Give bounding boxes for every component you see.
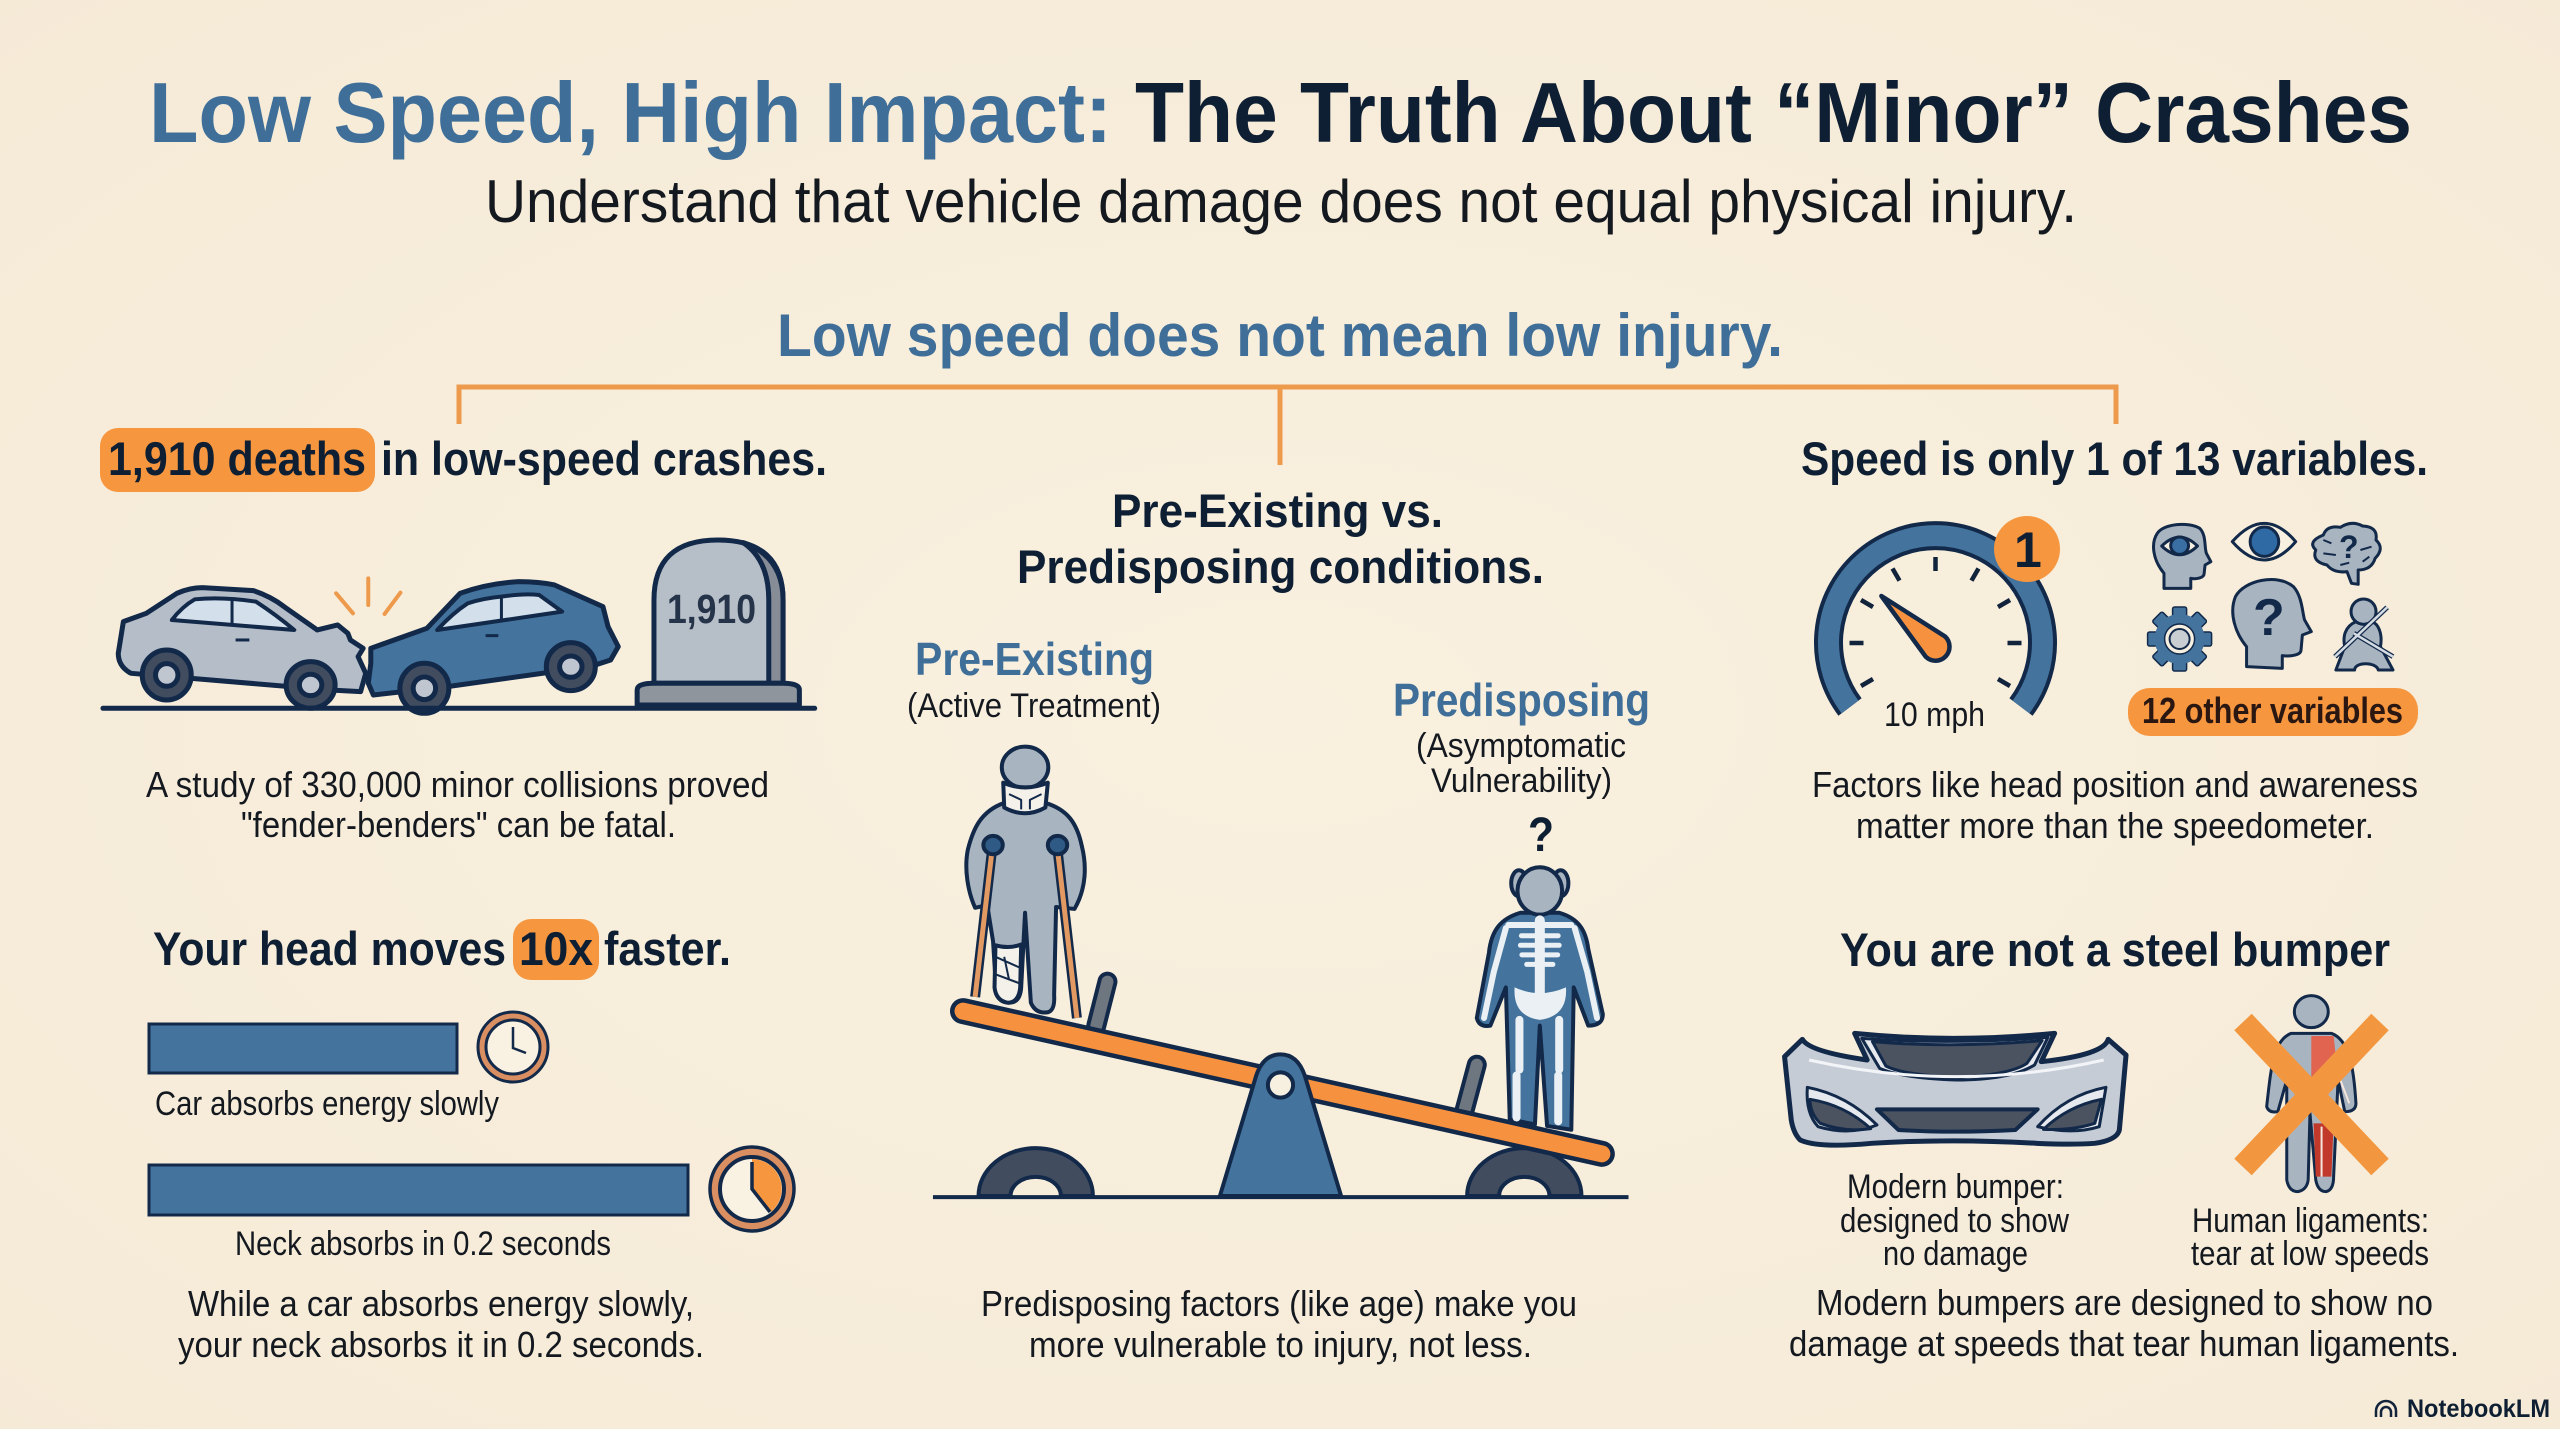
label: pre-existing: Pre-Existing bbox=[915, 633, 1154, 685]
label: predisposing: Predisposing bbox=[1393, 674, 1650, 726]
title: Low Speed, High Impact: bbox=[149, 66, 1112, 161]
heading with highlight: faster. bbox=[604, 922, 731, 975]
panel: head moves faster bbox=[149, 919, 794, 1365]
icon: clock fast bbox=[710, 1147, 794, 1231]
icon: speedometer: 10 mph bbox=[1884, 696, 1985, 734]
caption: A study of 330,000 minor collisions proved bbox=[146, 764, 769, 805]
question marks on icons: ? bbox=[2339, 529, 2359, 565]
label: human ligaments: Human ligaments: bbox=[2192, 1202, 2429, 1240]
panel: not a steel bumper bbox=[1785, 923, 2459, 1364]
caption: Factors like head position and awareness bbox=[1812, 764, 2418, 805]
figure: person with visible skeleton bbox=[1477, 867, 1603, 1130]
icon: speedometer: 1 bbox=[2014, 522, 2042, 578]
bar: car bbox=[149, 1024, 457, 1073]
seesaw stoppers bbox=[1096, 982, 1477, 1110]
bracket connector bbox=[459, 387, 2116, 465]
icon: speedometer bbox=[1828, 516, 2060, 734]
label: predisposing: Vulnerability) bbox=[1431, 762, 1612, 800]
label: car: Car absorbs energy slowly bbox=[155, 1085, 499, 1123]
icon: gear bbox=[2148, 607, 2212, 671]
watermark: NotebookLM: NotebookLM bbox=[2407, 1395, 2550, 1423]
heading bbox=[1017, 484, 1544, 593]
caption bbox=[981, 1283, 1577, 1365]
label: pre-existing bbox=[907, 633, 1161, 725]
caption: matter more than the speedometer. bbox=[1856, 805, 2374, 846]
wheels bbox=[979, 1148, 1581, 1196]
heading with highlight: in low-speed crashes. bbox=[381, 432, 827, 485]
illustration: human with ligaments crossed out bbox=[2267, 996, 2356, 1192]
panel: speed is one of 13 variables bbox=[1801, 432, 2428, 846]
label: human ligaments: tear at low speeds bbox=[2191, 1235, 2429, 1273]
caption: your neck absorbs it in 0.2 seconds. bbox=[178, 1324, 704, 1365]
caption bbox=[1812, 764, 2418, 846]
question marks on icons: ? bbox=[2253, 589, 2285, 647]
caption: "fender-benders" can be fatal. bbox=[241, 804, 676, 845]
title: The Truth About “Minor” Crashes bbox=[1135, 66, 2412, 161]
figure: injured person on crutches bbox=[966, 747, 1085, 1018]
label: modern bumper: Modern bumper: bbox=[1847, 1168, 2064, 1206]
panel: deaths in low-speed crashes bbox=[100, 428, 827, 845]
heading: Predisposing conditions. bbox=[1017, 540, 1544, 593]
caption: While a car absorbs energy slowly, bbox=[188, 1283, 694, 1324]
question marks on icons bbox=[2253, 529, 2359, 647]
illustration: seesaw with two figures bbox=[933, 747, 1629, 1197]
heading: Speed is only 1 of 13 variables. bbox=[1801, 432, 2428, 485]
heading with highlight: 10x bbox=[519, 922, 593, 975]
heading: Pre-Existing vs. bbox=[1112, 484, 1443, 537]
label: modern bumper: no damage bbox=[1883, 1235, 2028, 1273]
label: human ligaments bbox=[2191, 1202, 2429, 1273]
illustration: bumper bbox=[1785, 1033, 2126, 1145]
label: pre-existing: (Active Treatment) bbox=[907, 687, 1161, 725]
caption: damage at speeds that tear human ligaments. bbox=[1789, 1323, 2459, 1364]
caption bbox=[146, 764, 769, 845]
icons: other variables bbox=[2154, 523, 2393, 670]
title bbox=[149, 66, 2412, 161]
main message heading: Low speed does not mean low injury. bbox=[777, 302, 1783, 369]
caption: more vulnerable to injury, not less. bbox=[1029, 1324, 1532, 1365]
caption bbox=[178, 1283, 704, 1365]
label: predisposing: (Asymptomatic bbox=[1416, 727, 1626, 765]
plank bbox=[963, 1011, 1602, 1154]
caption: Predisposing factors (like age) make you bbox=[981, 1283, 1577, 1324]
heading with highlight bbox=[100, 428, 827, 492]
icon: clock slow bbox=[478, 1012, 548, 1082]
pill: 12 other variables: 12 other variables bbox=[2142, 690, 2403, 731]
question mark: ? bbox=[1528, 809, 1554, 862]
heading with highlight: Your head moves bbox=[153, 922, 506, 975]
fulcrum bbox=[1220, 1054, 1341, 1196]
label: modern bumper bbox=[1840, 1168, 2069, 1273]
subtitle: Understand that vehicle damage does not equal physical injury. bbox=[485, 168, 2077, 235]
caption bbox=[1789, 1282, 2459, 1364]
heading with highlight: 1,910 deaths bbox=[108, 432, 366, 485]
illustration: crashed cars and tombstone bbox=[103, 540, 815, 713]
bar: neck bbox=[149, 1165, 688, 1215]
tombstone number: 1,910 bbox=[667, 586, 756, 632]
panel: pre-existing vs predisposing bbox=[907, 484, 1650, 1365]
label: modern bumper: designed to show bbox=[1840, 1202, 2069, 1240]
label: predisposing bbox=[1393, 674, 1650, 800]
caption: Modern bumpers are designed to show no bbox=[1816, 1282, 2433, 1323]
heading: You are not a steel bumper bbox=[1840, 923, 2390, 976]
label: neck: Neck absorbs in 0.2 seconds bbox=[235, 1225, 611, 1263]
heading with highlight bbox=[153, 919, 731, 980]
icon: orange cross bbox=[2243, 1022, 2380, 1167]
